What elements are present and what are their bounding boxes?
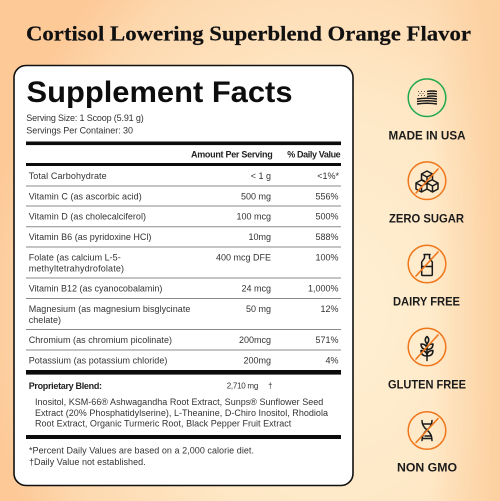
proprietary blend: Extract (20% Phosphatidylserine), L-Theanine, D-Chiro Inositol, Rhodiola <box>35 408 328 418</box>
nutrient rows: Chromium (as chromium picolinate) <box>29 335 172 345</box>
nutrient rows: 10mg <box>248 232 271 242</box>
nutrient rows: 100 mcg <box>236 212 271 222</box>
proprietary blend: Proprietary Blend: <box>29 381 102 391</box>
nutrient rows: Magnesium (as magnesium bisglycinate <box>29 304 190 314</box>
heading: supplement facts: Supplement Facts <box>26 76 292 109</box>
table header: Amount Per Serving <box>191 150 273 160</box>
proprietary blend: 2,710 mg <box>227 382 258 391</box>
serving information <box>26 113 144 135</box>
nutrient rows: 12% <box>320 304 338 314</box>
label: DAIRY FREE <box>393 296 460 308</box>
icon: american flag <box>408 79 446 116</box>
label: GLUTEN FREE <box>388 379 466 391</box>
nutrient rows: 200mcg <box>239 335 271 345</box>
proprietary blend: † <box>268 382 272 391</box>
nutrient rows: Potassium (as potassium chloride) <box>29 356 167 366</box>
label: ZERO SUGAR <box>389 213 465 225</box>
nutrient rows: <1%* <box>317 171 339 181</box>
nutrient rows: Folate (as calcium L-5- <box>29 253 121 263</box>
nutrient rows: 500% <box>315 212 338 222</box>
nutrient rows: 588% <box>315 232 338 242</box>
nutrient rows: chelate) <box>29 315 61 325</box>
proprietary blend <box>26 381 341 439</box>
icon: dna helix crossed out <box>408 412 446 449</box>
nutrient rows: 1,000% <box>308 284 338 294</box>
proprietary blend: Inositol, KSM-66® Ashwagandha Root Extract, Sunps® Sunflower Seed <box>35 397 323 407</box>
footnotes: †Daily Value not established. <box>29 457 146 467</box>
table header <box>26 142 341 166</box>
nutrient rows: 200mg <box>243 356 271 366</box>
nutrient rows: 4% <box>325 356 338 366</box>
icon: milk bottle crossed out <box>408 245 446 283</box>
proprietary blend: Root Extract, Organic Turmeric Root, Black Pepper Fruit Extract <box>35 419 292 429</box>
nutrient rows <box>26 171 341 375</box>
nutrient rows: Vitamin B12 (as cyanocobalamin) <box>29 284 162 294</box>
nutrient rows: 400 mcg DFE <box>216 253 271 263</box>
nutrient rows: 24 mcg <box>241 284 271 294</box>
badge: zero sugar <box>389 162 465 225</box>
panel background <box>14 66 353 486</box>
footnotes <box>29 445 254 467</box>
label: MADE IN USA <box>388 130 466 142</box>
nutrient rows: Vitamin C (as ascorbic acid) <box>29 191 142 201</box>
footnotes: *Percent Daily Values are based on a 2,000 calorie diet. <box>29 445 254 455</box>
nutrient rows: 100% <box>315 253 338 263</box>
badge: dairy free <box>393 245 460 308</box>
nutrient rows: 500 mg <box>241 191 271 201</box>
icon: wheat crossed out <box>408 328 446 366</box>
badge: non gmo <box>397 412 457 474</box>
serving information: Servings Per Container: 30 <box>26 125 133 135</box>
table header: % Daily Value <box>287 150 341 160</box>
panel: supplement facts <box>14 66 353 486</box>
nutrient rows: Vitamin B6 (as pyridoxine HCl) <box>29 232 151 242</box>
nutrient rows: 50 mg <box>246 304 271 314</box>
title: Cortisol Lowering Superblend Orange Flavor <box>26 22 471 46</box>
nutrient rows: methyltetrahydrofolate) <box>29 263 124 273</box>
label: NON GMO <box>397 462 457 474</box>
serving information: Serving Size: 1 Scoop (5.91 g) <box>26 113 144 123</box>
nutrient rows: Total Carbohydrate <box>29 171 107 181</box>
nutrient rows: 556% <box>315 191 338 201</box>
nutrient rows: 571% <box>315 335 338 345</box>
nutrient rows: Vitamin D (as cholecalciferol) <box>29 212 146 222</box>
icon: sugar cubes crossed out <box>408 162 446 200</box>
badge: gluten free <box>388 328 466 391</box>
badge: made in usa <box>388 79 466 142</box>
nutrient rows: < 1 g <box>251 171 271 181</box>
